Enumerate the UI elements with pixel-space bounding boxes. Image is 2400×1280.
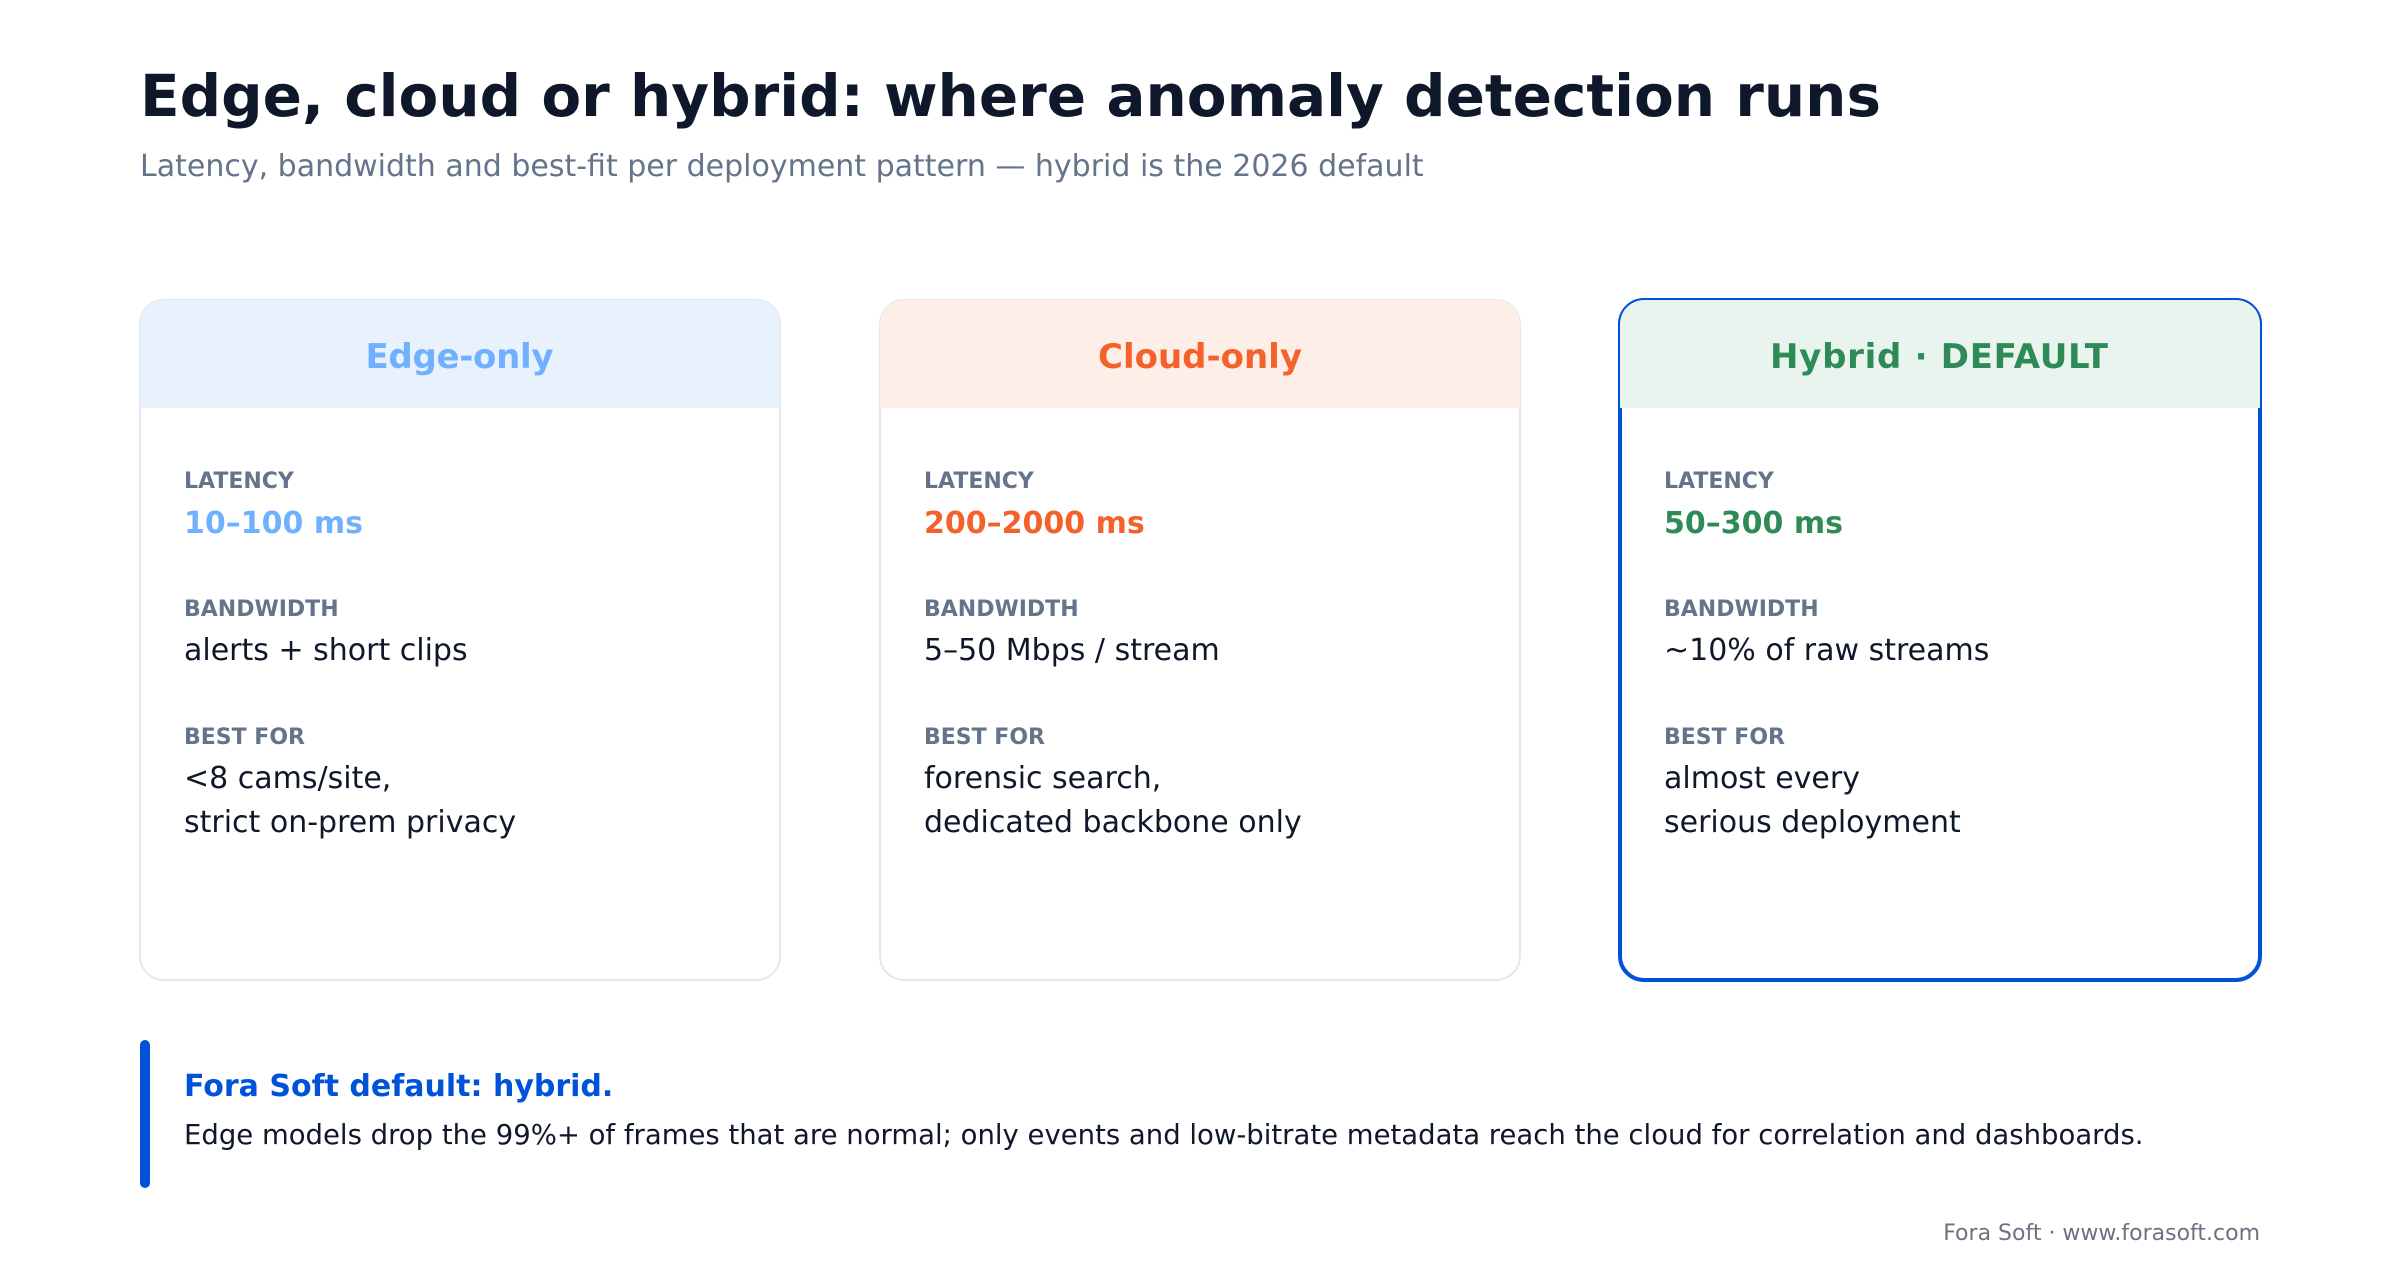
heading: cloud-only: Cloud-only [1098, 337, 1302, 377]
latency: edge-only: LATENCY [184, 469, 295, 494]
panel: edge-only [140, 300, 780, 980]
latency: hybrid [1664, 469, 1843, 541]
latency: edge-only: 10–100 ms [184, 506, 363, 541]
bandwidth: edge-only: BANDWIDTH [184, 597, 339, 622]
panel: cloud-only [880, 300, 1520, 980]
heading: edge-only: Edge-only [366, 337, 554, 377]
best for: hybrid: almost every [1664, 761, 1860, 796]
footer credit: Fora Soft · www.forasoft.com [1943, 1221, 2260, 1246]
latency: hybrid: LATENCY [1664, 469, 1775, 494]
callout heading: Fora Soft default: hybrid. [184, 1069, 613, 1104]
bandwidth: cloud-only [924, 597, 1220, 668]
latency: edge-only [184, 469, 363, 541]
best for: edge-only: <8 cams/site, [184, 761, 391, 796]
best for: cloud-only [924, 725, 1302, 840]
best for: hybrid [1664, 725, 1961, 840]
bandwidth: hybrid: ~10% of raw streams [1664, 633, 1989, 668]
best for: cloud-only: BEST FOR [924, 725, 1045, 750]
panel: hybrid [1620, 300, 2260, 980]
best for: hybrid: serious deployment [1664, 805, 1961, 840]
latency: hybrid: 50–300 ms [1664, 506, 1843, 541]
bandwidth: cloud-only: BANDWIDTH [924, 597, 1079, 622]
bandwidth: edge-only [184, 597, 468, 668]
latency: cloud-only [924, 469, 1145, 541]
latency: cloud-only: LATENCY [924, 469, 1035, 494]
subtitle: Latency, bandwidth and best-fit per deployment pattern — hybrid is the 2026 default [140, 149, 1424, 184]
callout [140, 1040, 2144, 1188]
best for: hybrid: BEST FOR [1664, 725, 1785, 750]
best for: edge-only: BEST FOR [184, 725, 305, 750]
bandwidth: hybrid: BANDWIDTH [1664, 597, 1819, 622]
latency: cloud-only: 200–2000 ms [924, 506, 1145, 541]
best for: cloud-only: forensic search, [924, 761, 1161, 796]
best for: edge-only: strict on-prem privacy [184, 805, 516, 840]
bandwidth: edge-only: alerts + short clips [184, 633, 468, 668]
callout accent bar [140, 1040, 150, 1188]
title: Edge, cloud or hybrid: where anomaly detection runs [140, 62, 1881, 130]
bandwidth: hybrid [1664, 597, 1989, 668]
best for: cloud-only: dedicated backbone only [924, 805, 1302, 840]
bandwidth: cloud-only: 5–50 Mbps / stream [924, 633, 1220, 668]
heading: hybrid: Hybrid · DEFAULT [1770, 337, 2109, 377]
best for: edge-only [184, 725, 516, 840]
callout body: Edge models drop the 99%+ of frames that are normal; only events and low-bitrate metadata reach the cloud for correlation and dashboards. [184, 1119, 2144, 1151]
